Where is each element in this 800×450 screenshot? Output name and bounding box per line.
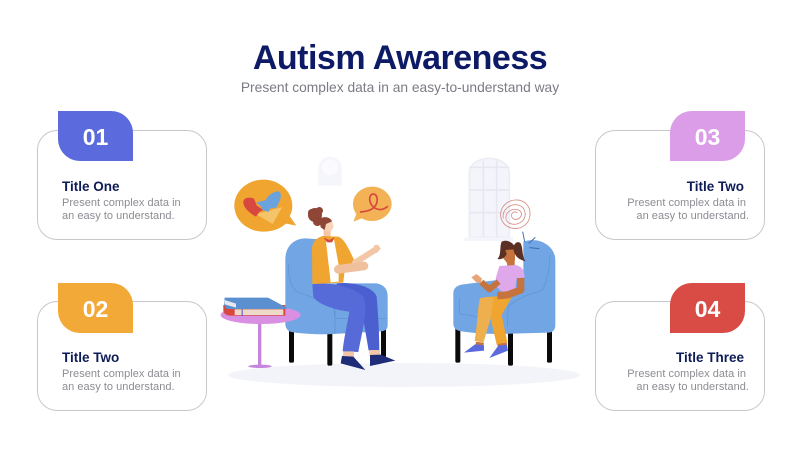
- panel: card 01: [37, 111, 207, 240]
- panel: card 03: [595, 111, 765, 240]
- number tab 03: 03: [695, 124, 720, 150]
- speech bubble: ribbon: [353, 187, 392, 222]
- side table: [221, 306, 301, 368]
- heading 02: Title Two: [62, 350, 119, 365]
- armchair: [285, 238, 388, 366]
- icon: wall clock: [318, 157, 342, 186]
- number tab 01: [58, 111, 133, 161]
- panel: card 04: [595, 283, 765, 411]
- number tab 02: 02: [83, 296, 108, 322]
- text 04: [627, 368, 749, 393]
- heading 04: Title Three: [676, 350, 744, 365]
- therapist: [308, 207, 395, 370]
- speech bubble: puzzle heart: [234, 180, 296, 232]
- card outline 01: [37, 130, 207, 240]
- text 02: [62, 368, 181, 393]
- heading 03: Title Two: [687, 179, 744, 194]
- text 01: Present complex data in: [62, 197, 181, 209]
- card outline 04: [595, 301, 765, 411]
- number tab 04: 04: [695, 296, 720, 322]
- subtitle: Present complex data in an easy-to-understand way: [241, 80, 559, 95]
- floor shadow: [228, 363, 580, 387]
- text 04: Present complex data in: [627, 368, 746, 380]
- books: [223, 298, 287, 316]
- number tab 03: [670, 111, 745, 161]
- title: Autism Awareness: [253, 39, 547, 77]
- text 04: an easy to understand.: [636, 381, 749, 393]
- icon: window: [464, 158, 513, 241]
- panel: card 02: [37, 283, 207, 411]
- icon: tangled scribble: [501, 200, 530, 228]
- child: [464, 241, 526, 358]
- child side: [453, 158, 555, 366]
- text 02: an easy to understand.: [62, 381, 175, 393]
- text 02: Present complex data in: [62, 368, 181, 380]
- heading 01: Title One: [62, 179, 120, 194]
- text 01: an easy to understand.: [62, 210, 175, 222]
- card outline 03: [595, 130, 765, 240]
- text 03: [627, 197, 749, 222]
- text 03: Present complex data in: [627, 197, 746, 209]
- therapist side: [221, 157, 395, 370]
- text 03: an easy to understand.: [636, 210, 749, 222]
- text 01: [62, 197, 181, 222]
- number tab 01: 01: [83, 124, 108, 150]
- armchair: [453, 232, 555, 366]
- card outline 02: [37, 301, 207, 411]
- number tab 04: [670, 283, 745, 333]
- number tab 02: [58, 283, 133, 333]
